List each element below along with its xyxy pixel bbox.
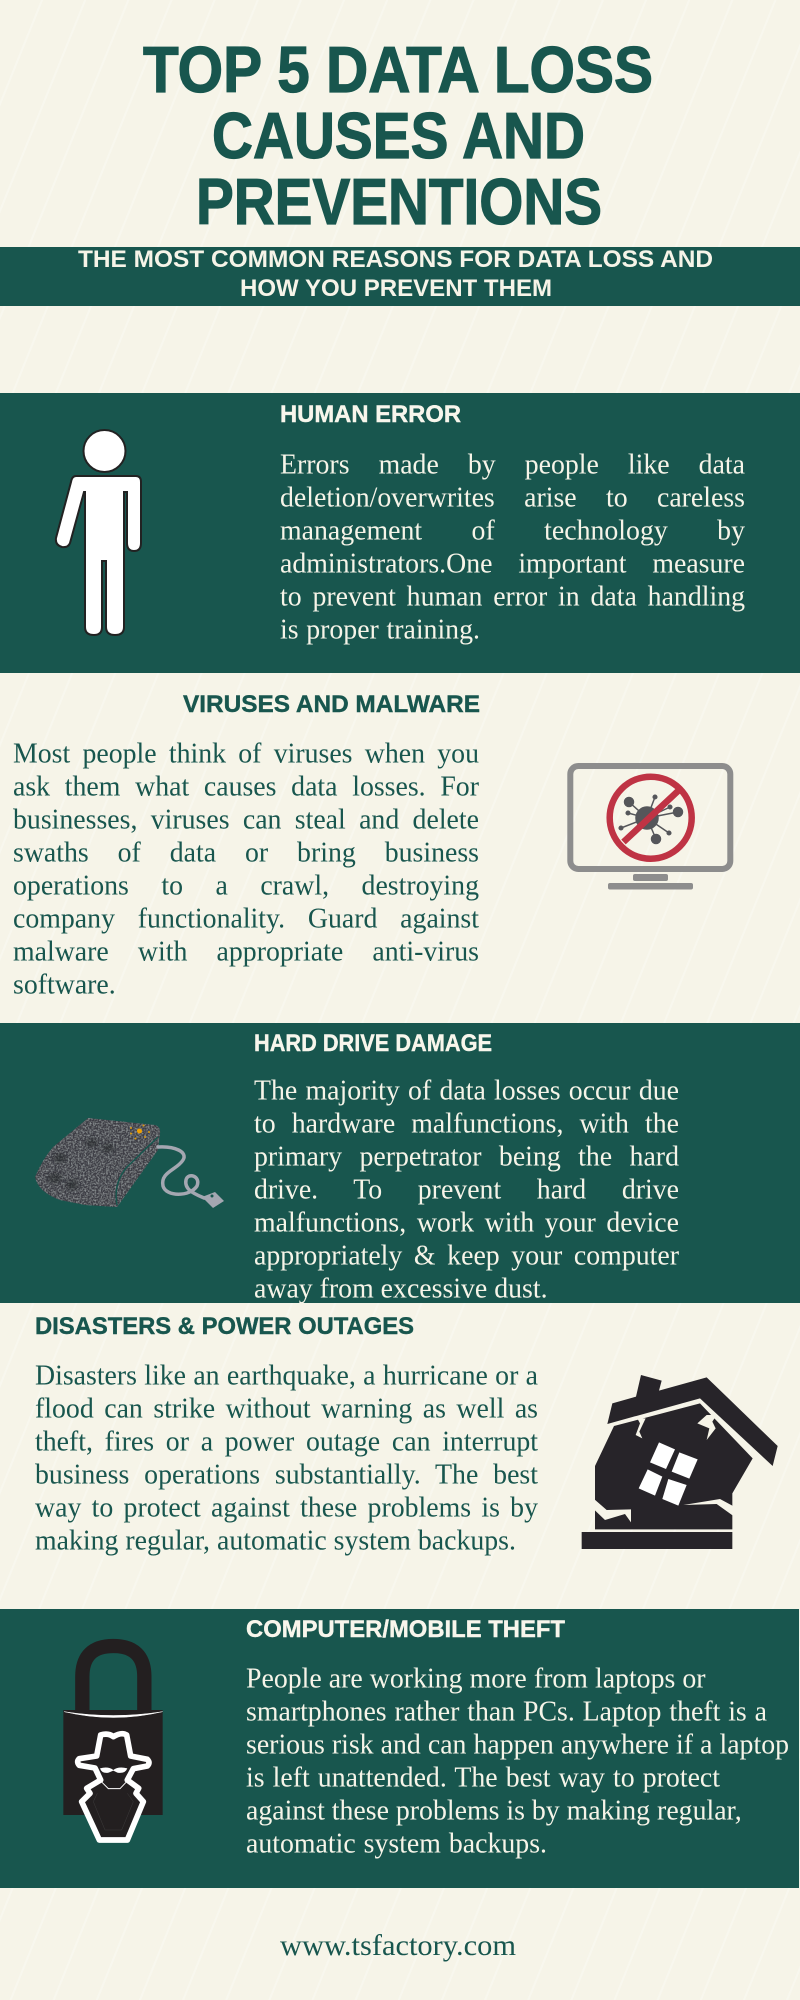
heading: hard drive damage: HARD DRIVE DAMAGE — [254, 1030, 492, 1057]
icon: damaged hard drive — [35, 1118, 224, 1208]
text: human error — [280, 448, 745, 645]
text: computer and mobile theft: smartphones rather than PCs. Laptop theft is a — [246, 1695, 767, 1727]
text: viruses and malware: businesses, viruses can steal and delete — [13, 803, 479, 835]
text: human error: is proper training. — [280, 613, 480, 645]
panel: computer and mobile theft — [0, 1609, 799, 1888]
text: hard drive damage — [254, 1074, 679, 1303]
text: viruses and malware: operations to a crawl, destroying — [13, 869, 479, 901]
text: computer and mobile theft: is left unattended. The best way to protect — [246, 1761, 720, 1793]
panel: hard drive damage — [0, 1023, 800, 1303]
text: hard drive damage: to hardware malfunctions, with the — [254, 1107, 679, 1139]
subtitle banner — [0, 247, 800, 306]
subtitle banner: HOW YOU PREVENT THEM — [240, 275, 552, 302]
heading: computer and mobile theft: COMPUTER/MOBILE THEFT — [246, 1616, 565, 1643]
title: TOP 5 DATA LOSS — [143, 33, 653, 106]
text: disasters and power outages: flood can strike without warning as well as — [35, 1392, 538, 1424]
title: CAUSES AND — [212, 99, 585, 172]
icon: monitor with blocked virus — [570, 766, 730, 890]
text: viruses and malware — [13, 737, 479, 1000]
panel: disasters and power outages — [35, 1313, 778, 1556]
text: disasters and power outages: Disasters like an earthquake, a hurricane or a — [35, 1359, 538, 1391]
title: PREVENTIONS — [196, 165, 602, 238]
heading: disasters and power outages: DISASTERS & POWER OUTAGES — [35, 1313, 414, 1340]
text: human error: administrators.One important measure — [280, 547, 745, 579]
heading: viruses and malware: VIRUSES AND MALWARE — [183, 691, 480, 718]
website url: www.tsfactory.com — [280, 1929, 516, 1962]
text: hard drive damage: away from excessive dust. — [254, 1272, 548, 1303]
text: human error: to prevent human error in data handling — [280, 580, 745, 612]
text: hard drive damage: appropriately & keep your computer — [254, 1239, 679, 1271]
text: hard drive damage: The majority of data losses occur due — [254, 1074, 679, 1106]
icon: cracked house — [582, 1375, 778, 1549]
text: computer and mobile theft: automatic system backups. — [246, 1827, 547, 1859]
icon: person — [56, 430, 141, 635]
text: computer and mobile theft: People are working more from laptops or — [246, 1662, 706, 1694]
text: disasters and power outages — [35, 1359, 538, 1556]
text: disasters and power outages: business operations substantially. The best — [35, 1458, 538, 1490]
text: computer and mobile theft — [246, 1662, 789, 1859]
text: viruses and malware: software. — [13, 968, 116, 1000]
text: viruses and malware: malware with appropriate anti-virus — [13, 935, 479, 967]
text: viruses and malware: swaths of data or bring business — [13, 836, 479, 868]
heading: human error: HUMAN ERROR — [280, 401, 461, 428]
text: hard drive damage: drive. To prevent hard drive — [254, 1173, 679, 1205]
title — [143, 33, 653, 238]
text: disasters and power outages: way to protect against these problems is by — [35, 1491, 538, 1523]
text: viruses and malware: Most people think of viruses when you — [13, 737, 479, 769]
text: disasters and power outages: theft, fires or a power outage can interrupt — [35, 1425, 538, 1457]
panel: viruses and malware — [13, 691, 734, 1000]
text: disasters and power outages: making regular, automatic system backups. — [35, 1524, 516, 1556]
text: hard drive damage: malfunctions, work with your device — [254, 1206, 679, 1238]
panel: human error — [0, 393, 800, 673]
text: hard drive damage: primary perpetrator being the hard — [254, 1140, 679, 1172]
text: human error: management of technology by — [280, 514, 745, 546]
text: viruses and malware: ask them what causes data losses. For — [13, 770, 479, 802]
text: computer and mobile theft: serious risk and can happen anywhere if a laptop — [246, 1728, 789, 1760]
text: human error: Errors made by people like data — [280, 448, 745, 480]
text: human error: deletion/overwrites arise to careless — [280, 481, 745, 513]
text: viruses and malware: company functionality. Guard against — [13, 902, 479, 934]
text: computer and mobile theft: against these problems is by making regular, — [246, 1794, 742, 1826]
icon: padlock with thief — [63, 1646, 163, 1840]
